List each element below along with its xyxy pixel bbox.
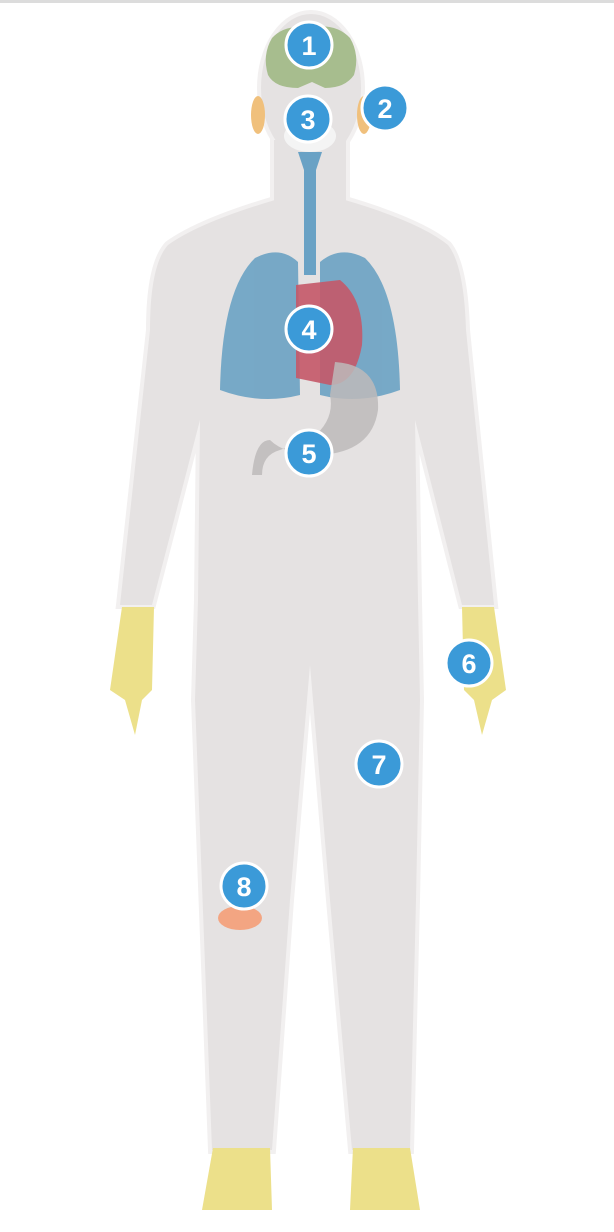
markers <box>221 22 492 909</box>
knee <box>218 906 262 930</box>
lungs <box>220 252 400 399</box>
marker numbers: 5 <box>301 439 317 469</box>
body silhouette <box>120 14 494 1150</box>
brain <box>266 26 356 88</box>
marker numbers: 1 <box>301 31 317 61</box>
marker numbers <box>236 31 477 902</box>
throat <box>284 120 336 152</box>
hands <box>110 607 506 735</box>
stomach <box>252 362 378 475</box>
spine <box>298 152 322 275</box>
ears <box>251 96 371 134</box>
marker numbers: 6 <box>461 649 477 679</box>
marker numbers: 4 <box>301 315 317 345</box>
marker numbers: 8 <box>236 872 252 902</box>
feet <box>202 1148 420 1210</box>
marker numbers: 2 <box>377 94 393 124</box>
heart <box>296 280 362 385</box>
marker numbers: 3 <box>300 105 316 135</box>
marker numbers: 7 <box>371 750 387 780</box>
